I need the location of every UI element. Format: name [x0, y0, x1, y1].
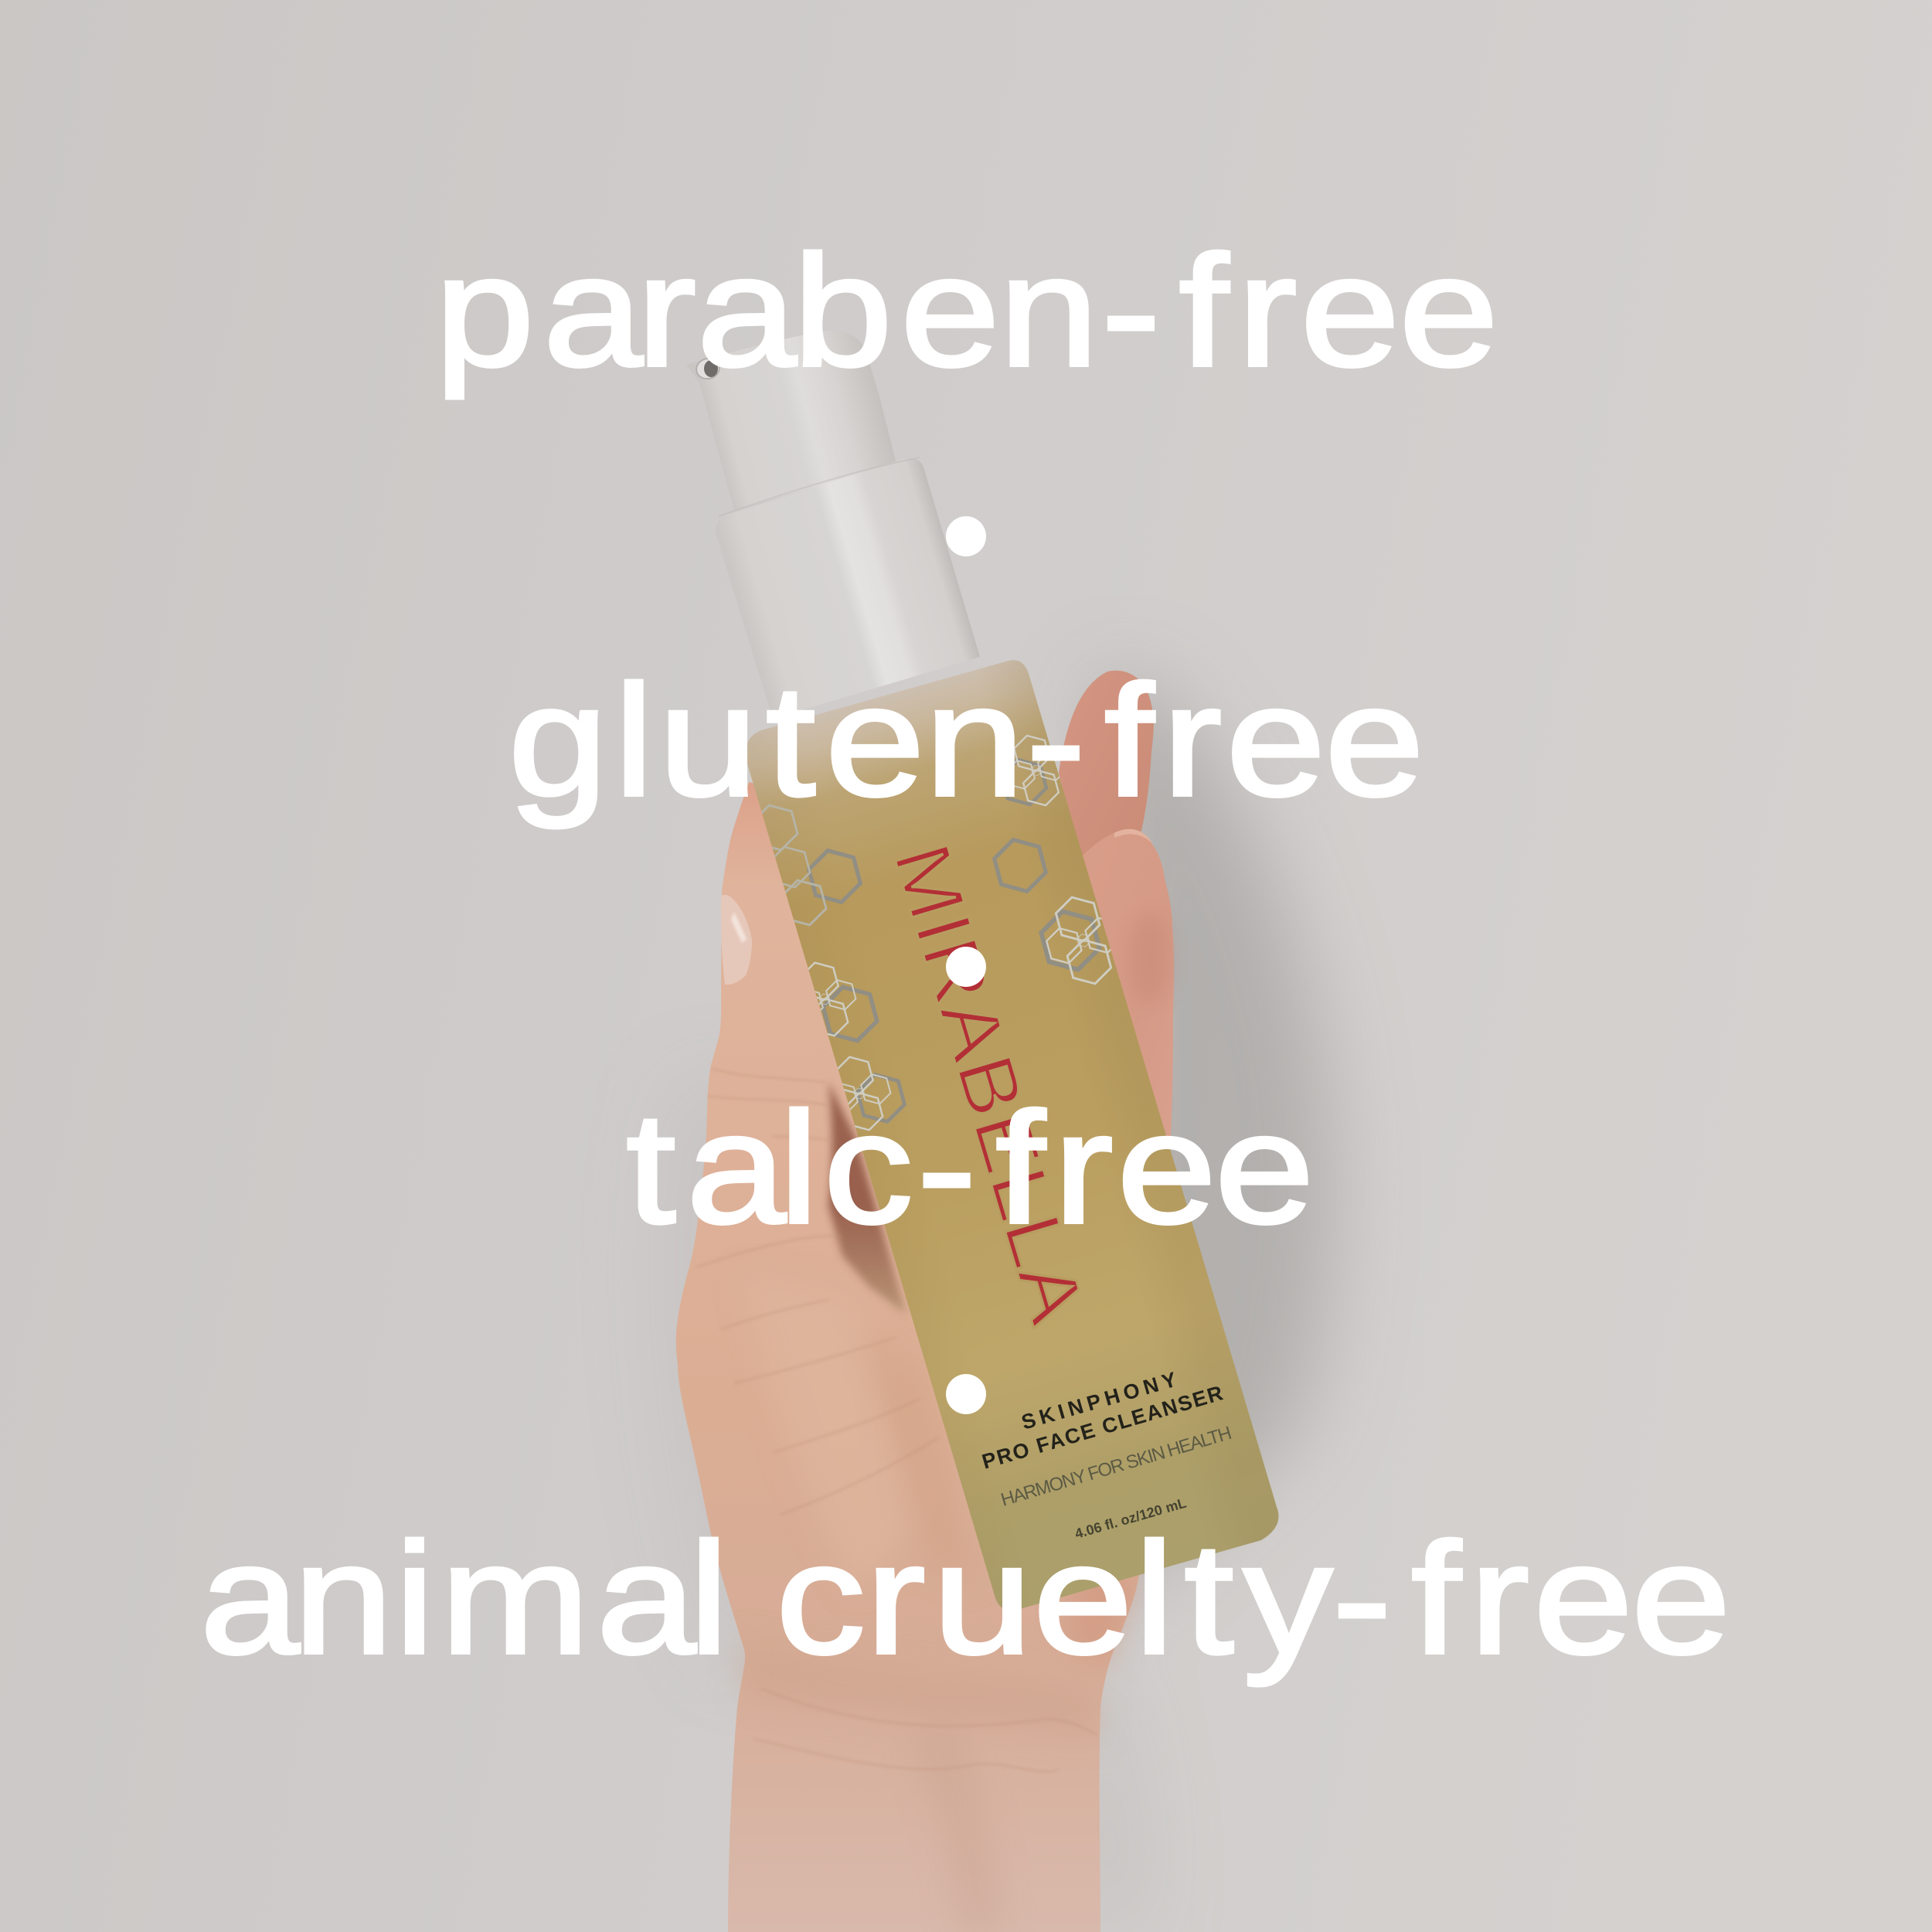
product label text: HARMONY FOR SKIN HEALTH [998, 1423, 1234, 1511]
hand and wrist silhouette [677, 783, 1140, 1932]
soft shadow of hand on wall [661, 680, 1333, 1932]
pump nozzle opening [694, 356, 722, 381]
product label text: SKINPHONY [1019, 1368, 1179, 1434]
product label text: 4.06 fl. oz/120 mL [1073, 1495, 1188, 1542]
bottle [686, 331, 1278, 1611]
claim: animal cruelty-free: animal cruelty-free [200, 1510, 1731, 1687]
claim: gluten-free: gluten-free [509, 652, 1424, 829]
shadow wedge between thumb and bottle [828, 1082, 906, 1314]
separator dot 2 [946, 947, 986, 987]
pump head [686, 331, 896, 510]
hand holding bottle [677, 671, 1174, 1932]
index finger behind bottle [1059, 671, 1154, 873]
skin shading [742, 1275, 1136, 1932]
skin creases [696, 1069, 1097, 1771]
finger shading and nail edge [1114, 829, 1153, 844]
list of claims [200, 223, 1731, 1687]
bottle body [746, 660, 1278, 1611]
claim: talc-free: talc-free [626, 1080, 1315, 1257]
thumb nail [721, 895, 752, 985]
separator dot 1 [946, 516, 986, 556]
product label text: PRO FACE CLEANSER [979, 1381, 1226, 1474]
brand name MIRABELLA: MIRABELLA [877, 834, 1102, 1333]
product label text [979, 1368, 1234, 1542]
separator dot 3 [946, 1374, 986, 1414]
middle finger behind bottle [1074, 830, 1174, 1136]
product photo and text composition [206, 249, 1725, 1932]
claim: paraben-free: paraben-free [435, 223, 1498, 400]
pump collar [716, 458, 980, 719]
silver hexagon pattern [762, 734, 1113, 1131]
